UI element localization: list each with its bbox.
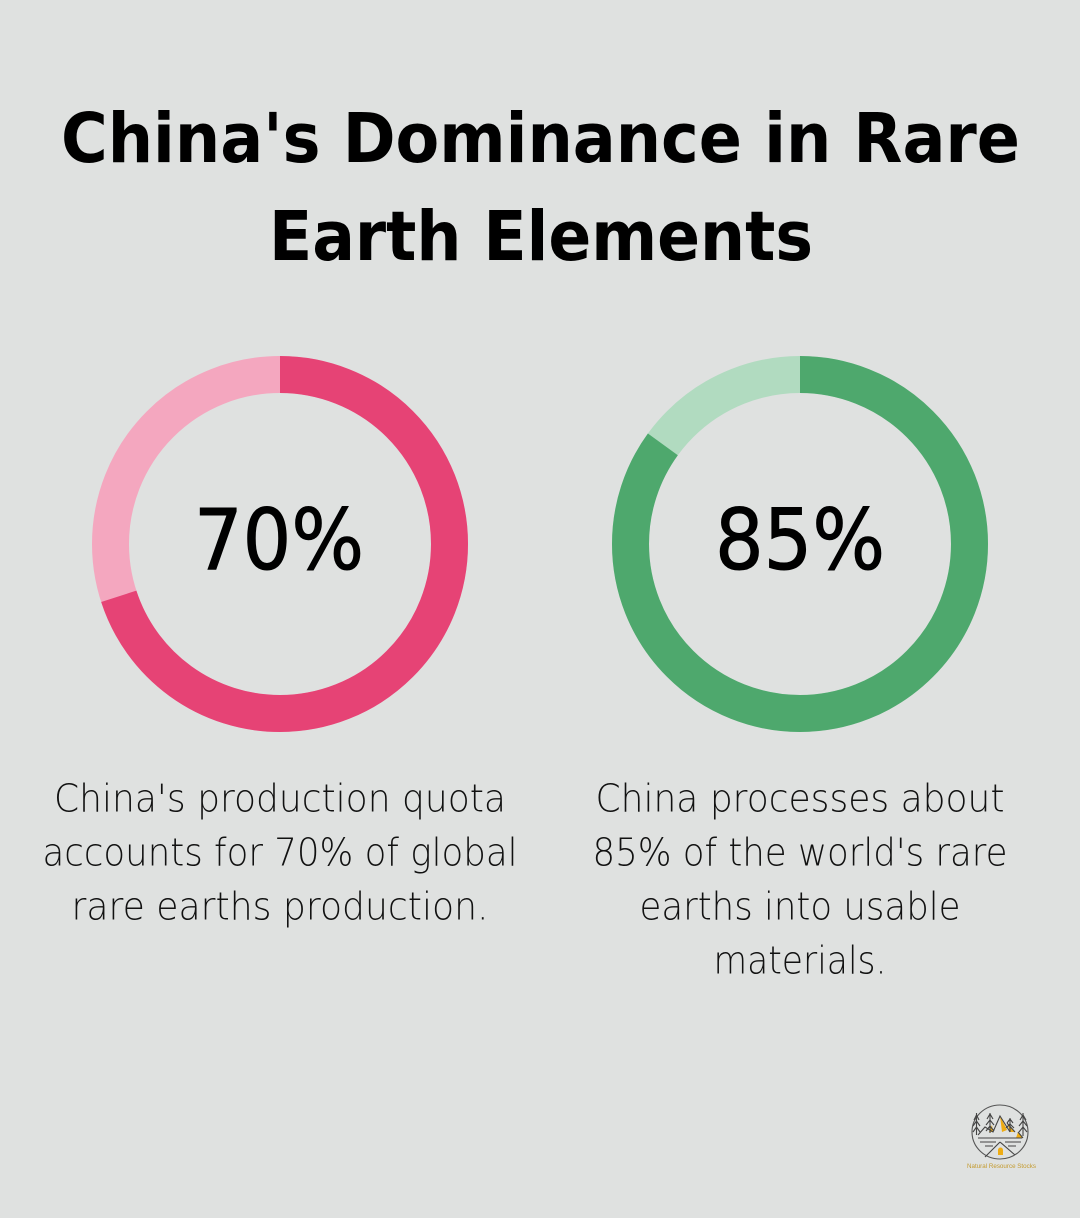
donut chart: 70% bbox=[110, 374, 450, 714]
donut chart: 85% bbox=[630, 374, 970, 714]
stat: 70%: 70% bbox=[194, 491, 364, 589]
text block: processing share: 85% of the world's rare bbox=[592, 830, 1008, 876]
title: Earth Elements bbox=[269, 197, 813, 277]
icon: Natural Resource Stocks logo bbox=[967, 1105, 1036, 1170]
title bbox=[61, 99, 1020, 277]
logo wordmark: Natural Resource Stocks bbox=[967, 1163, 1036, 1170]
text block: processing share: China processes about bbox=[596, 776, 1004, 822]
text block: production quota bbox=[42, 776, 518, 930]
title: China's Dominance in Rare bbox=[61, 99, 1020, 179]
stat: 85%: 85% bbox=[715, 491, 885, 589]
text block: processing share: earths into usable bbox=[640, 884, 960, 930]
text block: processing share bbox=[592, 776, 1008, 984]
text block: production quota: accounts for 70% of global bbox=[42, 830, 518, 876]
text block: processing share: materials. bbox=[714, 938, 886, 984]
text block: production quota: China's production quota bbox=[54, 776, 506, 822]
text block: production quota: rare earths production. bbox=[72, 884, 488, 930]
